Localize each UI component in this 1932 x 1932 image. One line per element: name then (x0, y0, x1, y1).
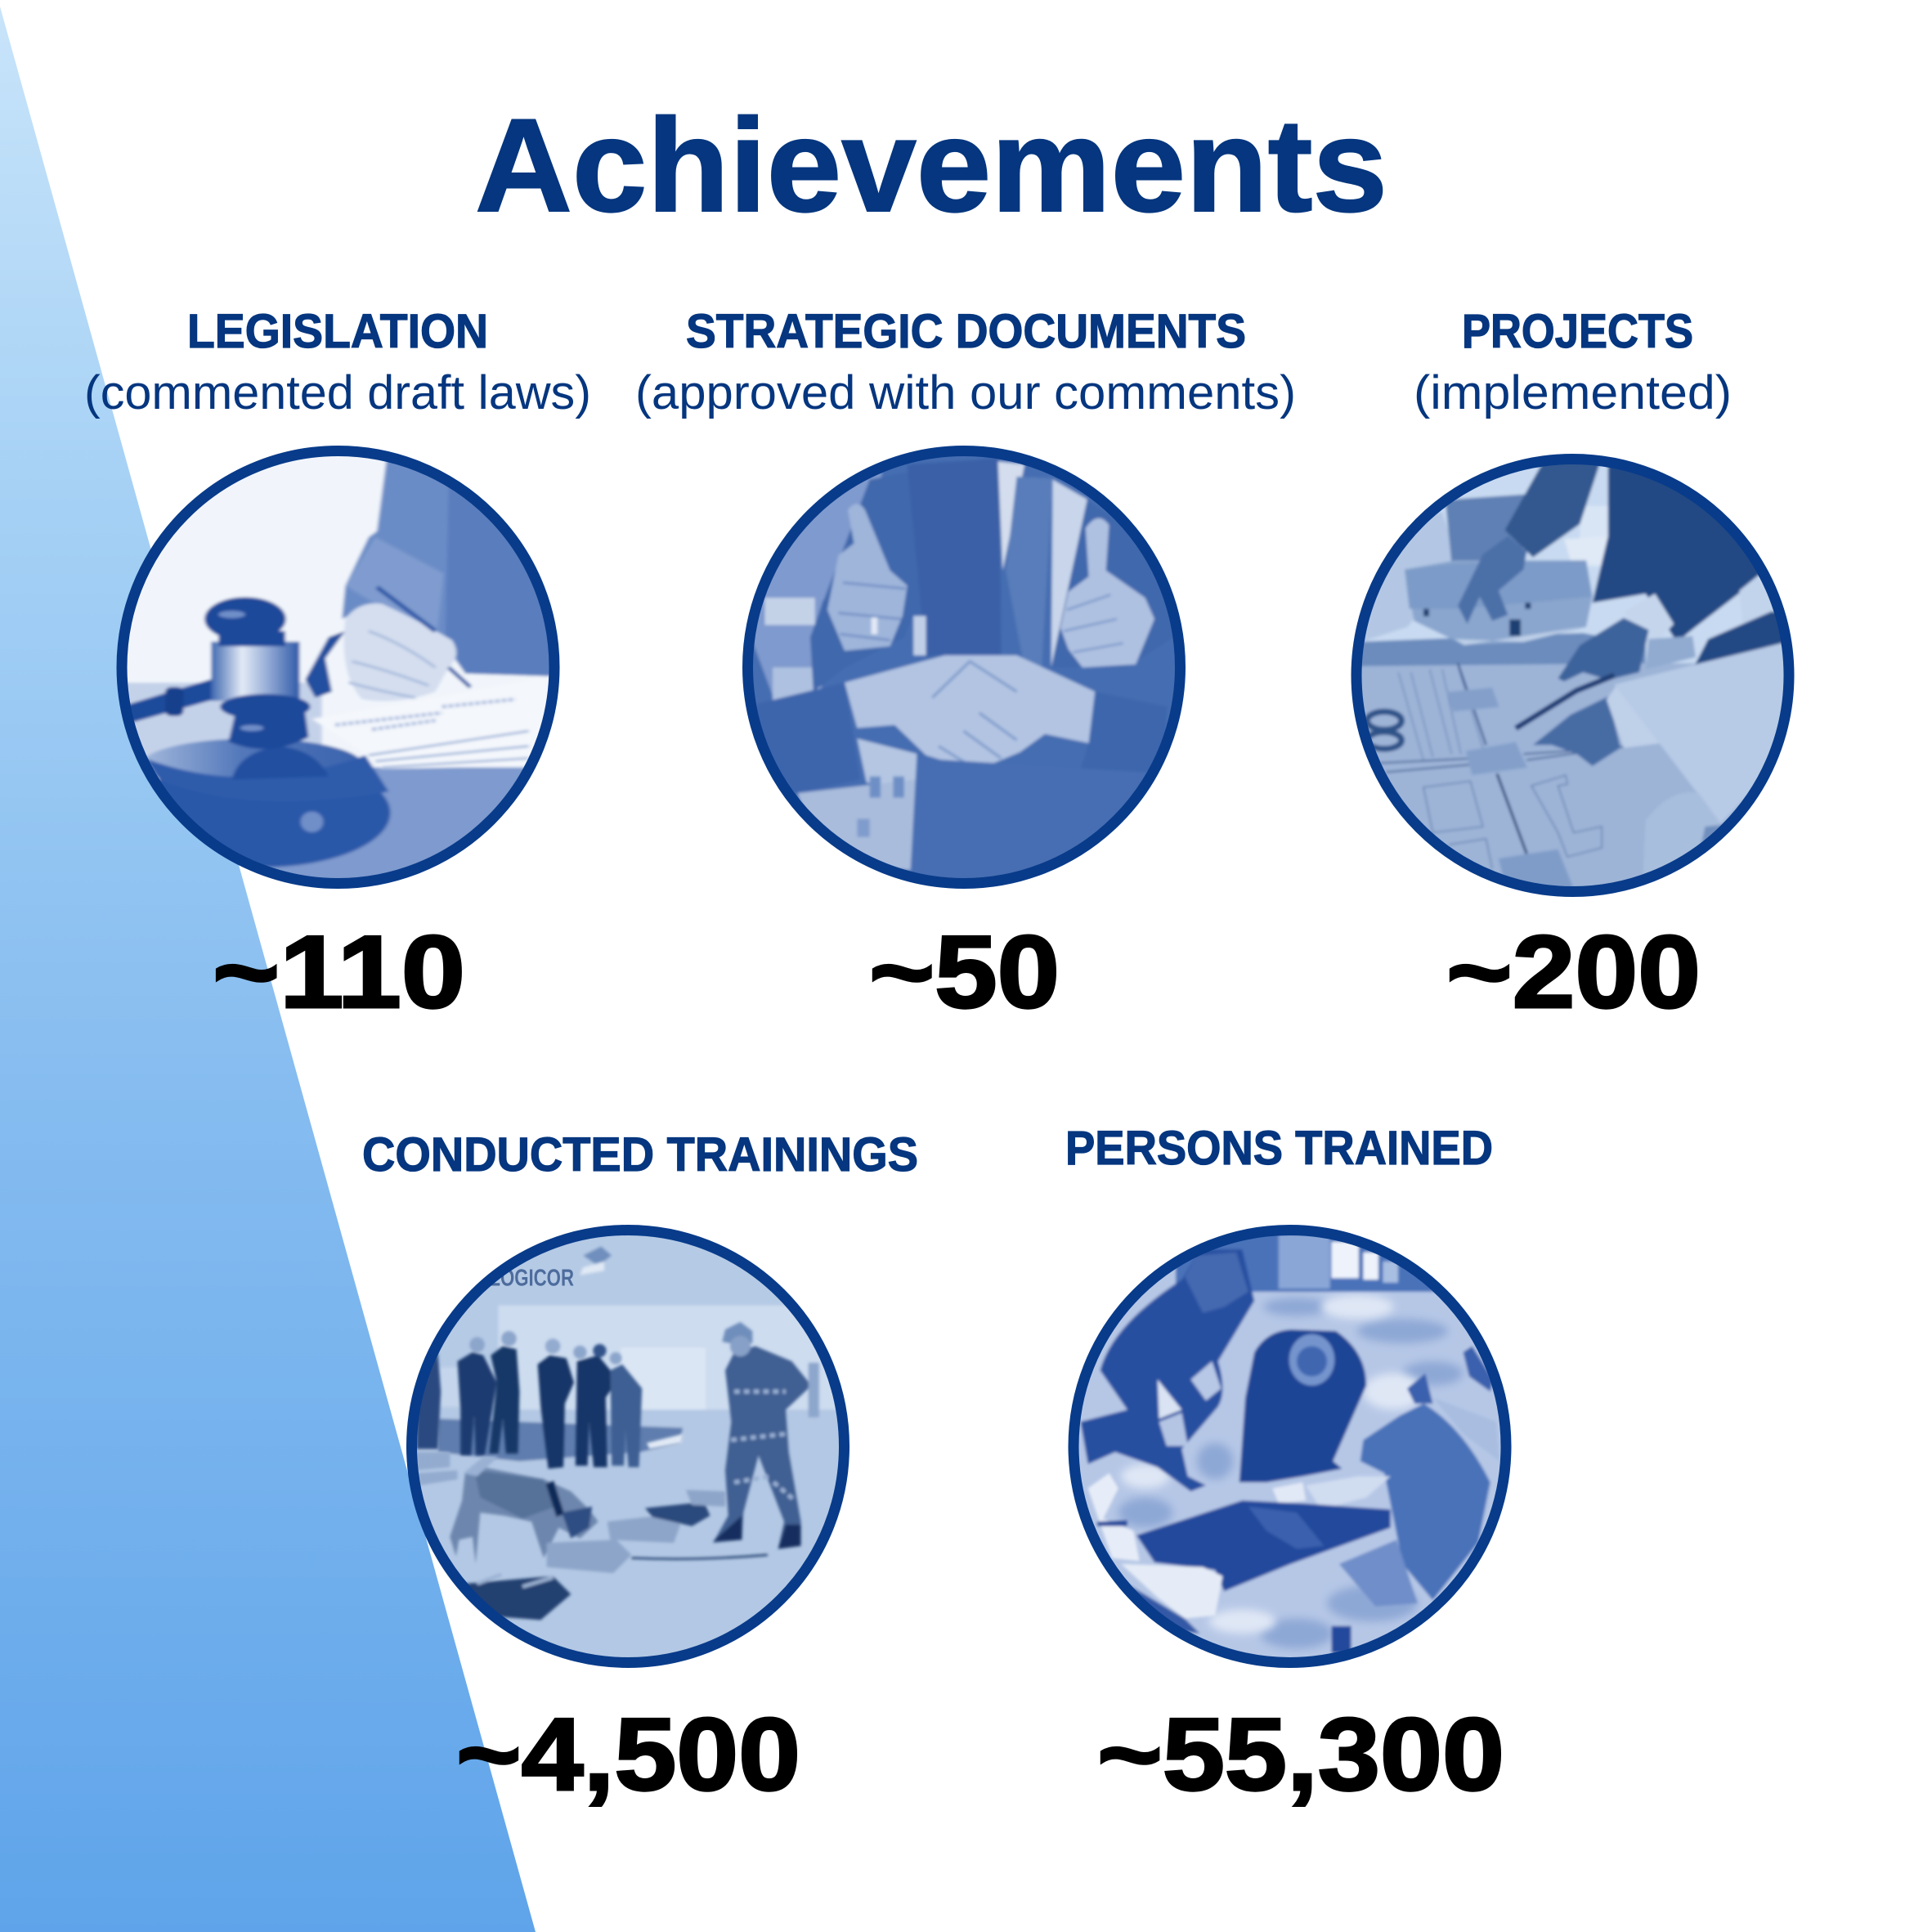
photo ring (1074, 1230, 1506, 1663)
photo ring (122, 451, 554, 883)
photo: handshake and thumbs up (753, 456, 1175, 878)
sign lettering in photo: LOGICOR (489, 1266, 574, 1292)
photo ring (1356, 459, 1789, 891)
photo: gavel and hand signing document (128, 456, 549, 878)
number: ~200: ~200 (1446, 914, 1701, 1029)
number: ~4,500: ~4,500 (456, 1697, 800, 1812)
photo: first aid training on the ground (1079, 1235, 1501, 1657)
heading: conducted trainings: CONDUCTED TRAININGS (362, 1128, 918, 1181)
panel: conducted trainings (362, 1128, 918, 1812)
heading: strategic documents: STRATEGIC DOCUMENTS (686, 305, 1246, 358)
number: ~50: ~50 (869, 914, 1060, 1029)
subheading: commented draft laws: (commented draft laws) (84, 366, 591, 419)
title: Achievements (475, 92, 1387, 240)
panel: persons trained (1055, 1122, 1529, 1812)
panel: projects (1351, 313, 1794, 1010)
heading: persons trained: PERSONS TRAINED (1065, 1122, 1493, 1175)
subheading: approved with our comments: (approved with our comments) (635, 366, 1296, 419)
photo: architects over building plans (1362, 464, 1784, 886)
number: ~110: ~110 (213, 914, 465, 1029)
panel: legislation (82, 305, 605, 1029)
number: ~55,300: ~55,300 (1097, 1697, 1504, 1812)
background blue gradient wedge (0, 7, 536, 1932)
photo ring (412, 1230, 844, 1663)
subheading: implemented: (implemented) (1414, 366, 1732, 419)
heading: projects: PROJECTS (1462, 305, 1693, 358)
photo ring (747, 451, 1181, 883)
heading: legislation: LEGISLATION (187, 305, 488, 358)
photo: dog handler training (417, 1235, 839, 1657)
panel: strategic documents (635, 305, 1296, 1029)
